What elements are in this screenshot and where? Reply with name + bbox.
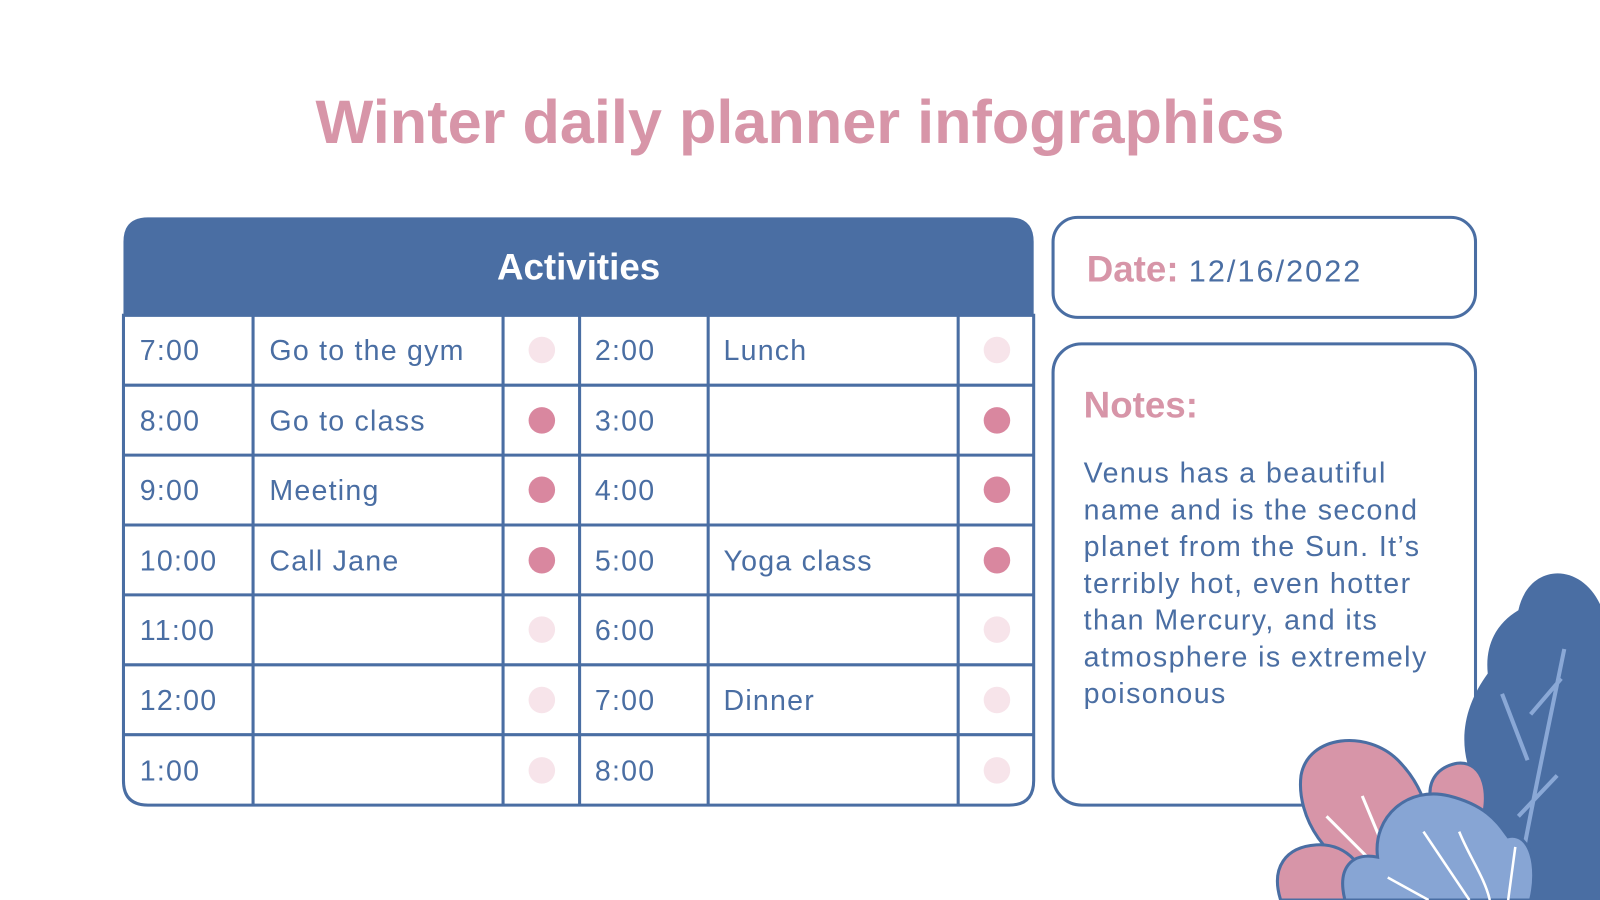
table text: 3:00 xyxy=(595,406,655,438)
panel: date xyxy=(1053,217,1476,317)
table text: 7:00 xyxy=(595,685,655,717)
panel: notes: than Mercury, and its xyxy=(1084,605,1378,637)
table text: Go to the gym xyxy=(269,335,465,367)
icon: leaves decoration xyxy=(1277,573,1600,900)
title: Winter daily planner infographics xyxy=(316,88,1284,156)
table text xyxy=(140,335,873,788)
panel: date: Date: 12/16/2022 xyxy=(1087,249,1362,290)
table text: Dinner xyxy=(723,685,815,717)
table text: 4:00 xyxy=(595,475,655,507)
table header xyxy=(123,217,1034,315)
panel: notes: Venus has a beautiful xyxy=(1084,458,1387,490)
table text: 7:00 xyxy=(140,335,200,367)
table header: Activities xyxy=(497,247,660,288)
panel: notes: terribly hot, even hotter xyxy=(1084,568,1412,600)
panel: notes: atmosphere is extremely xyxy=(1084,641,1428,673)
panel: notes: name and is the second xyxy=(1084,494,1418,526)
table text: Go to class xyxy=(269,406,426,438)
table text: Yoga class xyxy=(723,545,873,577)
table text: Call Jane xyxy=(269,545,399,577)
panel: activities table xyxy=(123,217,1034,805)
table text: 11:00 xyxy=(140,615,215,647)
table text: 12:00 xyxy=(140,685,217,717)
table text: 8:00 xyxy=(595,756,655,788)
table text: 8:00 xyxy=(140,406,200,438)
panel: notes: planet from the Sun. It’s xyxy=(1084,531,1421,563)
panel: notes: poisonous xyxy=(1084,678,1227,710)
table text: 10:00 xyxy=(140,545,217,577)
table text: Lunch xyxy=(723,335,807,367)
table text: 1:00 xyxy=(140,756,200,788)
panel: notes: Notes: xyxy=(1084,384,1198,425)
table text: 9:00 xyxy=(140,475,200,507)
panel: notes xyxy=(1053,344,1476,805)
table text: 6:00 xyxy=(595,615,655,647)
status dots xyxy=(529,337,1010,784)
table text: 5:00 xyxy=(595,545,655,577)
table text: Meeting xyxy=(269,475,380,507)
table text: 2:00 xyxy=(595,335,655,367)
